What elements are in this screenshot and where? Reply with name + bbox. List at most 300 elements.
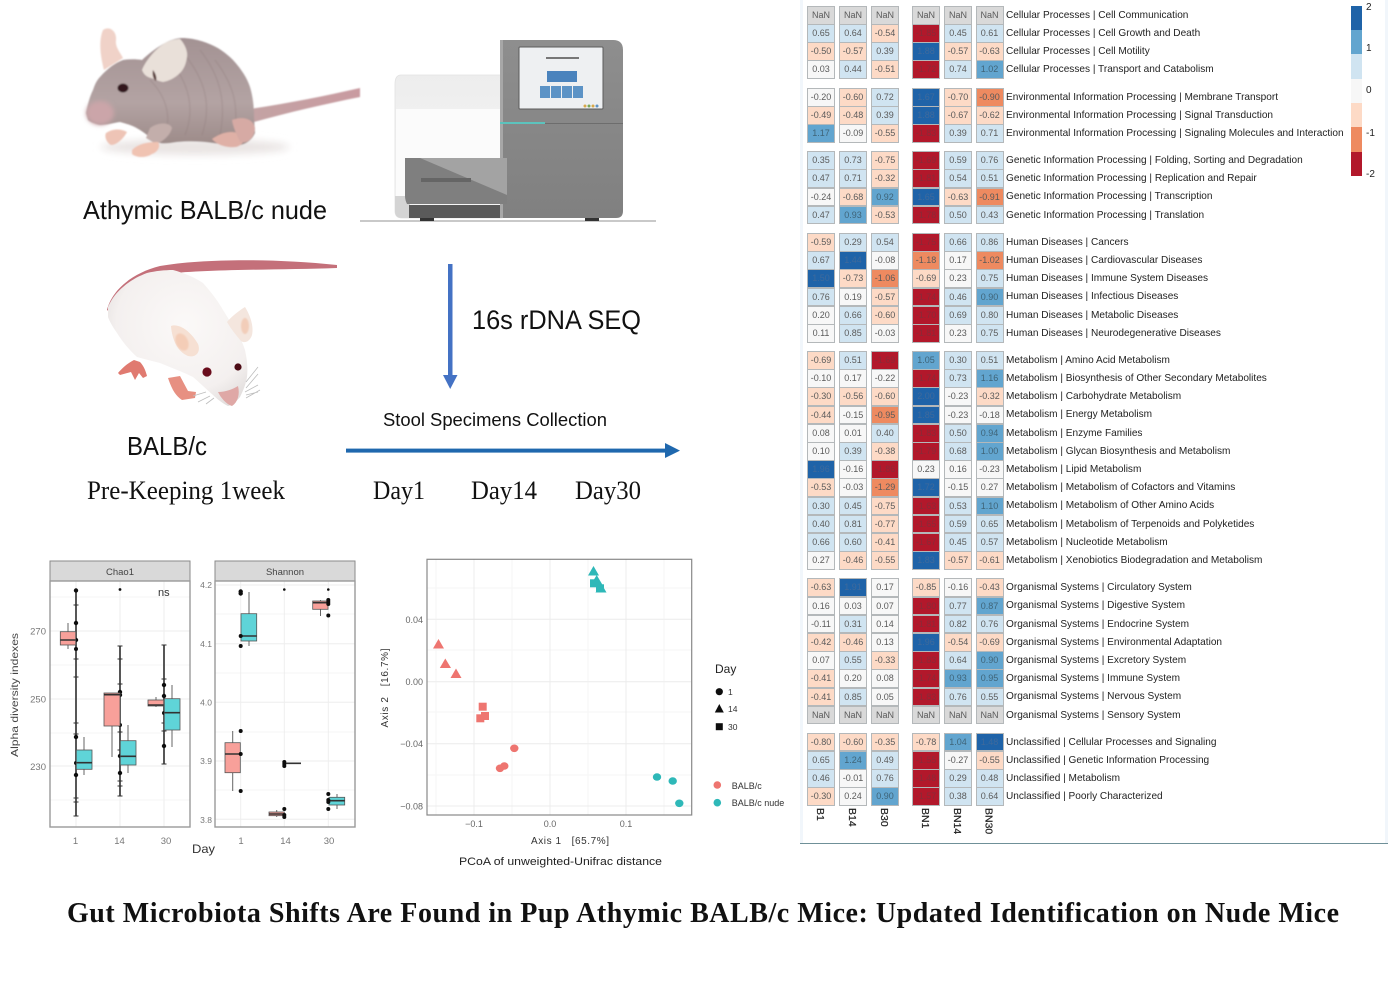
group: Metabolism: -1.63 bbox=[916, 501, 936, 511]
axis title: Day: Day bbox=[192, 842, 215, 856]
group: Cellular Processes: 1.88 bbox=[917, 46, 935, 56]
group: Organismal Systems: -1.81 bbox=[916, 619, 936, 629]
group: Genetic Information Processing: 0.47 bbox=[812, 210, 830, 220]
group: Unclassified: 0.90 bbox=[876, 791, 894, 801]
group: Human Diseases: 0.90 bbox=[981, 292, 998, 302]
legend: Day: 30 bbox=[728, 722, 738, 732]
group: Cellular Processes: Cellular Processes | Cell Motility bbox=[1006, 46, 1150, 57]
group: Human Diseases: 0.11 bbox=[813, 328, 829, 338]
group: Metabolism: 0.51 bbox=[981, 355, 998, 365]
group: Unclassified: 1.04 bbox=[949, 737, 967, 747]
group: Human Diseases: 0.66 bbox=[844, 310, 862, 320]
legend: Day: Day bbox=[715, 662, 736, 676]
group: Cellular Processes: 0.39 bbox=[876, 46, 894, 56]
group: Environmental Information Processing: -0.49 bbox=[811, 110, 831, 120]
group: Metabolism: 0.27 bbox=[812, 555, 830, 565]
group: Organismal Systems: -0.33 bbox=[875, 655, 895, 665]
group: Metabolism: 0.45 bbox=[844, 501, 862, 511]
text: Pre-Keeping 1week: Pre-Keeping 1week bbox=[87, 476, 285, 505]
y axis: Chao1 ticks: 270 bbox=[30, 626, 46, 638]
whiskers bbox=[193, 367, 260, 404]
group: Unclassified: -0.60 bbox=[843, 737, 863, 747]
boxes bbox=[233, 592, 337, 817]
group: Environmental Information Processing: -0.48 bbox=[843, 110, 863, 120]
group: Metabolism: 0.30 bbox=[812, 501, 830, 511]
group: Organismal Systems: -0.43 bbox=[979, 582, 1000, 592]
group: Organismal Systems: -0.69 bbox=[979, 637, 1000, 647]
group: Human Diseases: Human Diseases | Neurodegenerative Diseases bbox=[1006, 328, 1221, 339]
group: Metabolism: Metabolism | Glycan Biosynthesis and Metabolism bbox=[1006, 446, 1230, 457]
group: Human Diseases: Human Diseases | Metabolic Diseases bbox=[1006, 310, 1178, 321]
group: Metabolism: -1.29 bbox=[875, 482, 895, 492]
group: Genetic Information Processing: 0.50 bbox=[949, 210, 967, 220]
group: Metabolism: -1.79 bbox=[916, 446, 936, 456]
group: Unclassified: Unclassified | Poorly Characterized bbox=[1006, 791, 1163, 802]
group: Organismal Systems: -1.83 bbox=[916, 692, 936, 702]
group: Human Diseases: -1.81 bbox=[916, 328, 936, 338]
group: Metabolism: 1.96 bbox=[812, 464, 830, 474]
group: Metabolism: -0.03 bbox=[843, 482, 863, 492]
ear left bbox=[171, 325, 199, 356]
group: Human Diseases: 0.54 bbox=[876, 237, 894, 247]
group: Environmental Information Processing: -0.55 bbox=[875, 128, 895, 138]
group: Organismal Systems: 0.90 bbox=[981, 655, 998, 665]
panel: Shannon bbox=[215, 561, 355, 827]
photo: white BALB/c mouse bbox=[107, 260, 337, 406]
snout bbox=[86, 101, 114, 125]
group: Organismal Systems: 0.07 bbox=[812, 655, 830, 665]
group: Organismal Systems: -0.85 bbox=[916, 582, 936, 592]
axis title: Axis 1: Axis 1 [65.7%] bbox=[531, 836, 609, 847]
y axis ticks: 0.04 bbox=[405, 615, 423, 625]
base line bbox=[360, 220, 656, 222]
group: Organismal Systems: 1.96 bbox=[917, 637, 935, 647]
group: Environmental Information Processing: Environmental Information Processing | Signaling Molecules and Interaction bbox=[1006, 128, 1344, 139]
group: Metabolism: 0.81 bbox=[844, 519, 862, 529]
group: Unclassified: -0.35 bbox=[875, 737, 895, 747]
group: Genetic Information Processing: -1.78 bbox=[916, 210, 936, 220]
strip: Shannon: Shannon bbox=[266, 567, 304, 578]
group: Genetic Information Processing: 0.35 bbox=[812, 155, 830, 165]
large ear bbox=[142, 39, 187, 82]
group: Organismal Systems: -0.46 bbox=[843, 637, 863, 647]
group: Genetic Information Processing: -0.32 bbox=[875, 173, 895, 183]
y axis: Shannon ticks bbox=[200, 580, 212, 825]
group: Genetic Information Processing: 0.71 bbox=[844, 173, 862, 183]
x axis: day ticks: 1 bbox=[73, 836, 78, 847]
group: Environmental Information Processing: -0.90 bbox=[979, 92, 1000, 102]
text: 16s rDNA SEQ: 16s rDNA SEQ bbox=[472, 305, 641, 335]
group: Organismal Systems: -0.41 bbox=[811, 692, 831, 702]
group: Human Diseases: 0.85 bbox=[844, 328, 862, 338]
group: Genetic Information Processing: -0.75 bbox=[875, 155, 895, 165]
group: Organismal Systems: -1.74 bbox=[916, 673, 936, 683]
legend: mouse group: BALB/c bbox=[732, 781, 762, 791]
group: Organismal Systems: Organismal Systems | Endocrine System bbox=[1006, 619, 1189, 630]
group: Organismal Systems: 0.13 bbox=[876, 637, 894, 647]
back ear bbox=[100, 28, 123, 70]
plot frame and grid bbox=[427, 559, 692, 815]
group: Metabolism: 1.83 bbox=[917, 555, 935, 565]
group: Metabolism: -0.46 bbox=[843, 555, 863, 565]
group: Metabolism: -0.41 bbox=[875, 537, 895, 547]
legend: colour scale: 1 bbox=[1366, 43, 1372, 54]
group: Human Diseases: -0.59 bbox=[811, 237, 831, 247]
group: Organismal Systems: Organismal Systems | Nervous System bbox=[1006, 691, 1181, 702]
group: Organismal Systems: -0.16 bbox=[948, 582, 968, 592]
group: Metabolism: 0.50 bbox=[949, 428, 967, 438]
group: Cellular Processes: 1.02 bbox=[981, 64, 998, 74]
annotation: ns: ns bbox=[158, 587, 170, 599]
y axis: Shannon ticks: 4.2 bbox=[200, 580, 212, 590]
photo: athymic nude mouse bbox=[86, 28, 360, 157]
group: Metabolism: 0.45 bbox=[949, 537, 967, 547]
group: Genetic Information Processing: Genetic Information Processing | Translation bbox=[1006, 210, 1204, 221]
group: Unclassified: -0.27 bbox=[948, 755, 968, 765]
y axis ticks bbox=[400, 615, 423, 812]
group: Cellular Processes: NaN bbox=[812, 10, 830, 20]
group: Metabolism: -0.56 bbox=[843, 391, 863, 401]
column label: BN30: BN30 bbox=[982, 808, 994, 834]
group: Unclassified: 0.38 bbox=[949, 791, 967, 801]
group: Metabolism: -0.77 bbox=[875, 519, 895, 529]
group: Cellular Processes: 0.74 bbox=[949, 64, 967, 74]
group: Cellular Processes: 0.61 bbox=[981, 28, 998, 38]
group: Environmental Information Processing: -0.62 bbox=[979, 110, 1000, 120]
legend: colour scale: 0 bbox=[1366, 85, 1372, 96]
group: Environmental Information Processing bbox=[807, 88, 1344, 143]
group: Metabolism: 0.51 bbox=[844, 355, 862, 365]
axis title: Alpha diversity indexes: Alpha diversity indexes bbox=[9, 633, 21, 757]
x axis: day ticks bbox=[73, 836, 334, 847]
group: Human Diseases: 1.50 bbox=[812, 273, 830, 283]
group: Human Diseases: 0.46 bbox=[949, 292, 967, 302]
feet bbox=[420, 218, 434, 221]
group: Organismal Systems: 0.31 bbox=[844, 619, 862, 629]
y axis: Shannon ticks: 3.9 bbox=[200, 756, 212, 766]
group: Unclassified: -0.78 bbox=[916, 737, 936, 747]
group: Metabolism: 0.68 bbox=[949, 446, 967, 456]
group: Metabolism: 0.73 bbox=[949, 373, 967, 383]
text: BALB/c: BALB/c bbox=[127, 431, 207, 461]
grey instrument module bbox=[500, 40, 623, 218]
group: Metabolism: -0.38 bbox=[875, 446, 895, 456]
wrinkles bbox=[150, 50, 236, 135]
group: Cellular Processes: NaN bbox=[917, 10, 935, 20]
arrow: sequencing down arrow bbox=[443, 264, 458, 389]
group: Cellular Processes: 0.44 bbox=[844, 64, 862, 74]
legs bbox=[146, 124, 172, 144]
group: Genetic Information Processing: 1.65 bbox=[917, 192, 935, 202]
y axis: Shannon ticks: 3.8 bbox=[200, 815, 212, 825]
group: Metabolism: -0.95 bbox=[875, 410, 895, 420]
group: Cellular Processes: -0.57 bbox=[948, 46, 968, 56]
legend: colour scale: -1 bbox=[1366, 128, 1375, 139]
group: Metabolism: -1.83 bbox=[916, 428, 936, 438]
legend: colour scale: 2 bbox=[1366, 2, 1372, 13]
group: Metabolism: 0.17 bbox=[844, 373, 862, 383]
white instrument module bbox=[395, 75, 502, 218]
tail bbox=[250, 88, 360, 122]
group: Genetic Information Processing: 0.51 bbox=[981, 173, 998, 183]
axis title: Axis 2: Axis 2 [16.7%] bbox=[380, 648, 391, 728]
group: Human Diseases: -1.70 bbox=[916, 310, 936, 320]
y axis: Chao1 ticks bbox=[30, 626, 46, 773]
group: Metabolism: 0.40 bbox=[812, 519, 830, 529]
group: Metabolism: -0.16 bbox=[843, 464, 863, 474]
group: Metabolism: Metabolism | Metabolism of Cofactors and Vitamins bbox=[1006, 482, 1235, 493]
group: Genetic Information Processing: Genetic Information Processing | Transcription bbox=[1006, 191, 1213, 202]
group: Environmental Information Processing: 0.72 bbox=[876, 92, 894, 102]
group: Organismal Systems: 0.64 bbox=[949, 655, 967, 665]
nose bbox=[218, 386, 239, 406]
group: Genetic Information Processing: Genetic Information Processing | Replication and Repair bbox=[1006, 173, 1257, 184]
group: Genetic Information Processing: -0.53 bbox=[875, 210, 895, 220]
strip: Shannon bbox=[215, 561, 355, 581]
group: Human Diseases: Human Diseases | Cancers bbox=[1006, 237, 1128, 248]
group: Unclassified: -1.57 bbox=[916, 791, 936, 801]
group: Metabolism: Metabolism | Carbohydrate Metabolism bbox=[1006, 391, 1181, 402]
group: Metabolism bbox=[807, 351, 1267, 570]
group: Cellular Processes: -0.54 bbox=[875, 28, 895, 38]
group: Unclassified: -0.55 bbox=[979, 755, 1000, 765]
x axis ticks: 0.0 bbox=[544, 819, 556, 829]
group: Organismal Systems: NaN bbox=[980, 710, 998, 720]
group: Organismal Systems: 0.95 bbox=[981, 673, 998, 683]
eye bbox=[118, 84, 128, 92]
group: Metabolism: 0.53 bbox=[949, 501, 967, 511]
group: Metabolism: 0.57 bbox=[981, 537, 998, 547]
group: Organismal Systems: 0.03 bbox=[844, 601, 862, 611]
group: Organismal Systems: NaN bbox=[844, 710, 862, 720]
legend: mouse group bbox=[714, 781, 784, 808]
group: Metabolism: -0.15 bbox=[948, 482, 968, 492]
group: Cellular Processes: 0.65 bbox=[812, 28, 830, 38]
y axis ticks: 0.00 bbox=[405, 677, 423, 687]
group: Unclassified: 0.48 bbox=[981, 773, 998, 783]
group: Human Diseases: -0.60 bbox=[875, 310, 895, 320]
panel: Chao1 bbox=[50, 561, 190, 827]
group: Metabolism: -0.69 bbox=[811, 355, 831, 365]
group: Metabolism: 1.72 bbox=[917, 482, 935, 492]
group: Organismal Systems: 0.05 bbox=[876, 692, 894, 702]
group: Organismal Systems bbox=[807, 578, 1222, 724]
group: Human Diseases: -0.03 bbox=[875, 328, 895, 338]
group: Metabolism: -0.57 bbox=[948, 555, 968, 565]
group: Organismal Systems: 0.07 bbox=[876, 601, 894, 611]
group: Unclassified: Unclassified | Metabolism bbox=[1006, 773, 1120, 784]
group: Organismal Systems: 0.93 bbox=[949, 673, 967, 683]
group: Organismal Systems: 0.76 bbox=[949, 692, 967, 702]
group: Human Diseases: 0.75 bbox=[981, 273, 998, 283]
series: BALB/c points bbox=[433, 639, 518, 772]
group: Unclassified: 1.48 bbox=[981, 737, 998, 747]
column label: B14: B14 bbox=[846, 808, 858, 827]
group: Human Diseases: -1.06 bbox=[875, 273, 895, 283]
group: Environmental Information Processing: 0.71 bbox=[981, 128, 998, 138]
group: Human Diseases: 0.17 bbox=[949, 255, 967, 265]
strip: Chao1 bbox=[50, 561, 190, 581]
group: Organismal Systems: NaN bbox=[876, 710, 894, 720]
group: Metabolism: -0.23 bbox=[948, 410, 968, 420]
group: Metabolism: 1.10 bbox=[981, 501, 998, 511]
group: Metabolism: -0.60 bbox=[875, 391, 895, 401]
group: Metabolism: 0.94 bbox=[981, 428, 998, 438]
x axis ticks: −0.1 bbox=[465, 819, 483, 829]
group: Unclassified: 0.29 bbox=[949, 773, 967, 783]
group: Metabolism: -0.75 bbox=[875, 501, 895, 511]
x axis: day ticks: 14 bbox=[280, 836, 291, 847]
ear right bbox=[227, 307, 253, 342]
group: Genetic Information Processing: 0.92 bbox=[876, 192, 894, 202]
chart: alpha diversity boxplots bbox=[9, 561, 355, 856]
panel: KEGG pathway heatmap bbox=[800, 0, 1388, 844]
group: Unclassified: Unclassified | Genetic Information Processing bbox=[1006, 755, 1209, 766]
group: Human Diseases: 0.76 bbox=[812, 292, 830, 302]
group: Genetic Information Processing: 0.59 bbox=[949, 155, 967, 165]
group: Cellular Processes: Cellular Processes | Transport and Catabolism bbox=[1006, 64, 1214, 75]
group: Cellular Processes: NaN bbox=[844, 10, 862, 20]
group: Unclassified: -0.80 bbox=[811, 737, 831, 747]
eyes bbox=[202, 367, 212, 377]
group: Metabolism: 0.27 bbox=[981, 482, 998, 492]
group: Organismal Systems: 0.82 bbox=[949, 619, 967, 629]
group: Genetic Information Processing: 0.47 bbox=[812, 173, 830, 183]
group: Human Diseases: -1.18 bbox=[916, 255, 936, 265]
group: Unclassified: 0.24 bbox=[844, 791, 862, 801]
group: Human Diseases: 0.23 bbox=[949, 273, 967, 283]
group: Metabolism: 1.16 bbox=[981, 373, 998, 383]
sample drawer bbox=[405, 158, 507, 204]
group: Metabolism: -0.53 bbox=[811, 482, 831, 492]
group: Metabolism: 1.00 bbox=[981, 446, 998, 456]
group: Genetic Information Processing: 0.93 bbox=[844, 210, 862, 220]
group: Environmental Information Processing: -0.09 bbox=[843, 128, 863, 138]
group: Organismal Systems: -0.11 bbox=[811, 619, 831, 629]
group: Organismal Systems: NaN bbox=[812, 710, 830, 720]
group: Cellular Processes: NaN bbox=[876, 10, 894, 20]
group: Metabolism: Metabolism | Metabolism of Terpenoids and Polyketides bbox=[1006, 519, 1254, 530]
group: Metabolism: 1.05 bbox=[917, 355, 935, 365]
group: Unclassified: Unclassified | Cellular Processes and Signaling bbox=[1006, 737, 1216, 748]
tail bbox=[107, 260, 337, 312]
text: Day14: Day14 bbox=[471, 476, 537, 505]
group: Cellular Processes: -0.50 bbox=[811, 46, 831, 56]
text: Stool Specimens Collection: Stool Specimens Collection bbox=[383, 410, 607, 430]
group: Cellular Processes: 0.64 bbox=[844, 28, 862, 38]
group: Metabolism: 0.65 bbox=[981, 519, 998, 529]
column label: B30: B30 bbox=[878, 808, 890, 827]
group: Metabolism: -1.69 bbox=[875, 355, 895, 365]
group: Organismal Systems: Organismal Systems | Excretory System bbox=[1006, 655, 1186, 666]
group: Organismal Systems: Organismal Systems | Immune System bbox=[1006, 673, 1180, 684]
group: Human Diseases: -1.74 bbox=[916, 292, 936, 302]
y axis ticks: −0.08 bbox=[400, 802, 423, 812]
arrow: timeline arrow bbox=[346, 443, 680, 458]
y axis: Chao1 ticks: 230 bbox=[30, 762, 46, 773]
group: Human Diseases bbox=[807, 233, 1221, 343]
group: Genetic Information Processing: Genetic Information Processing | Folding, Sorting and Degradation bbox=[1006, 155, 1303, 166]
group: Human Diseases: -0.73 bbox=[843, 273, 863, 283]
group: Organismal Systems: Organismal Systems | Circulatory System bbox=[1006, 582, 1192, 593]
group: Human Diseases: 0.20 bbox=[812, 310, 830, 320]
group: Metabolism: -1.67 bbox=[916, 537, 936, 547]
group: Unclassified: 0.76 bbox=[876, 773, 894, 783]
group: Metabolism: -0.44 bbox=[811, 410, 831, 420]
hind foot bbox=[212, 132, 243, 147]
legend: Day bbox=[715, 662, 738, 732]
group: Metabolism: 1.85 bbox=[917, 410, 935, 420]
group: Unclassified: 0.65 bbox=[812, 755, 830, 765]
group: Human Diseases: Human Diseases | Infectious Diseases bbox=[1006, 291, 1178, 302]
group: Genetic Information Processing: -0.63 bbox=[948, 192, 968, 202]
group: Metabolism: Metabolism | Amino Acid Metabolism bbox=[1006, 355, 1170, 366]
group: Organismal Systems: -1.83 bbox=[916, 655, 936, 665]
group: Organismal Systems: 0.20 bbox=[844, 673, 862, 683]
column label: B1: B1 bbox=[814, 808, 826, 821]
group: Metabolism: -0.23 bbox=[979, 464, 1000, 474]
group: Genetic Information Processing: -0.68 bbox=[843, 192, 863, 202]
x axis: day ticks: 30 bbox=[161, 836, 171, 847]
main title: Gut Microbiota Shifts Are Found in Pup Athymic BALB/c Mice: Updated Identification on Nude Mice bbox=[67, 898, 1339, 929]
group: Metabolism: 0.01 bbox=[844, 428, 862, 438]
legend: colour scale bbox=[1351, 2, 1375, 180]
group: Human Diseases: -0.69 bbox=[916, 273, 936, 283]
group: Genetic Information Processing bbox=[807, 151, 1303, 224]
group: Environmental Information Processing: Environmental Information Processing | Signal Transduction bbox=[1006, 110, 1273, 121]
y axis ticks: −0.04 bbox=[400, 739, 423, 749]
group: Cellular Processes: 0.45 bbox=[949, 28, 967, 38]
y axis: Chao1 ticks: 250 bbox=[30, 694, 46, 706]
group: Environmental Information Processing: -0.70 bbox=[948, 92, 968, 102]
teal status bar bbox=[500, 122, 545, 124]
group: Metabolism: -0.22 bbox=[875, 373, 895, 383]
group: Metabolism: 0.66 bbox=[812, 537, 830, 547]
group: Metabolism: -0.18 bbox=[979, 410, 1000, 420]
group: Organismal Systems: 0.85 bbox=[844, 692, 862, 702]
body bbox=[108, 270, 247, 406]
group: Organismal Systems: 0.08 bbox=[876, 673, 894, 683]
text: Athymic BALB/c nude: Athymic BALB/c nude bbox=[83, 195, 327, 225]
group: Human Diseases: 1.44 bbox=[844, 255, 862, 265]
group: Organismal Systems: -0.63 bbox=[811, 582, 831, 592]
group: Metabolism: 0.23 bbox=[917, 464, 935, 474]
group: Human Diseases: 0.67 bbox=[812, 255, 830, 265]
group: Genetic Information Processing: 0.43 bbox=[981, 210, 998, 220]
touch screen bbox=[519, 47, 603, 109]
group: Unclassified: 1.24 bbox=[844, 755, 862, 765]
group: Metabolism: Metabolism | Metabolism of Other Amino Acids bbox=[1006, 500, 1214, 511]
group: Metabolism: 0.40 bbox=[876, 428, 894, 438]
group: Genetic Information Processing: 0.76 bbox=[981, 155, 998, 165]
group: Organismal Systems: NaN bbox=[917, 710, 935, 720]
group: Unclassified: -0.30 bbox=[811, 791, 831, 801]
shadow bbox=[100, 139, 290, 155]
group: Metabolism: -0.15 bbox=[843, 410, 863, 420]
group: Unclassified: -1.48 bbox=[916, 773, 936, 783]
group: Cellular Processes: Cellular Processes | Cell Communication bbox=[1006, 10, 1188, 21]
group: Metabolism: Metabolism | Lipid Metabolism bbox=[1006, 464, 1141, 475]
group: Unclassified: -1.55 bbox=[916, 755, 936, 765]
caption: PCoA of unweighted-Unifrac distance: PCoA of unweighted-Unifrac distance bbox=[459, 856, 662, 868]
group: Metabolism: -0.55 bbox=[875, 555, 895, 565]
group: Unclassified: 0.64 bbox=[981, 791, 998, 801]
front leg and paw bbox=[168, 376, 196, 400]
group: Metabolism: 0.16 bbox=[949, 464, 967, 474]
group: Human Diseases: 0.80 bbox=[981, 310, 998, 320]
group: Organismal Systems: -0.41 bbox=[811, 673, 831, 683]
group: Metabolism: -1.86 bbox=[875, 464, 895, 474]
